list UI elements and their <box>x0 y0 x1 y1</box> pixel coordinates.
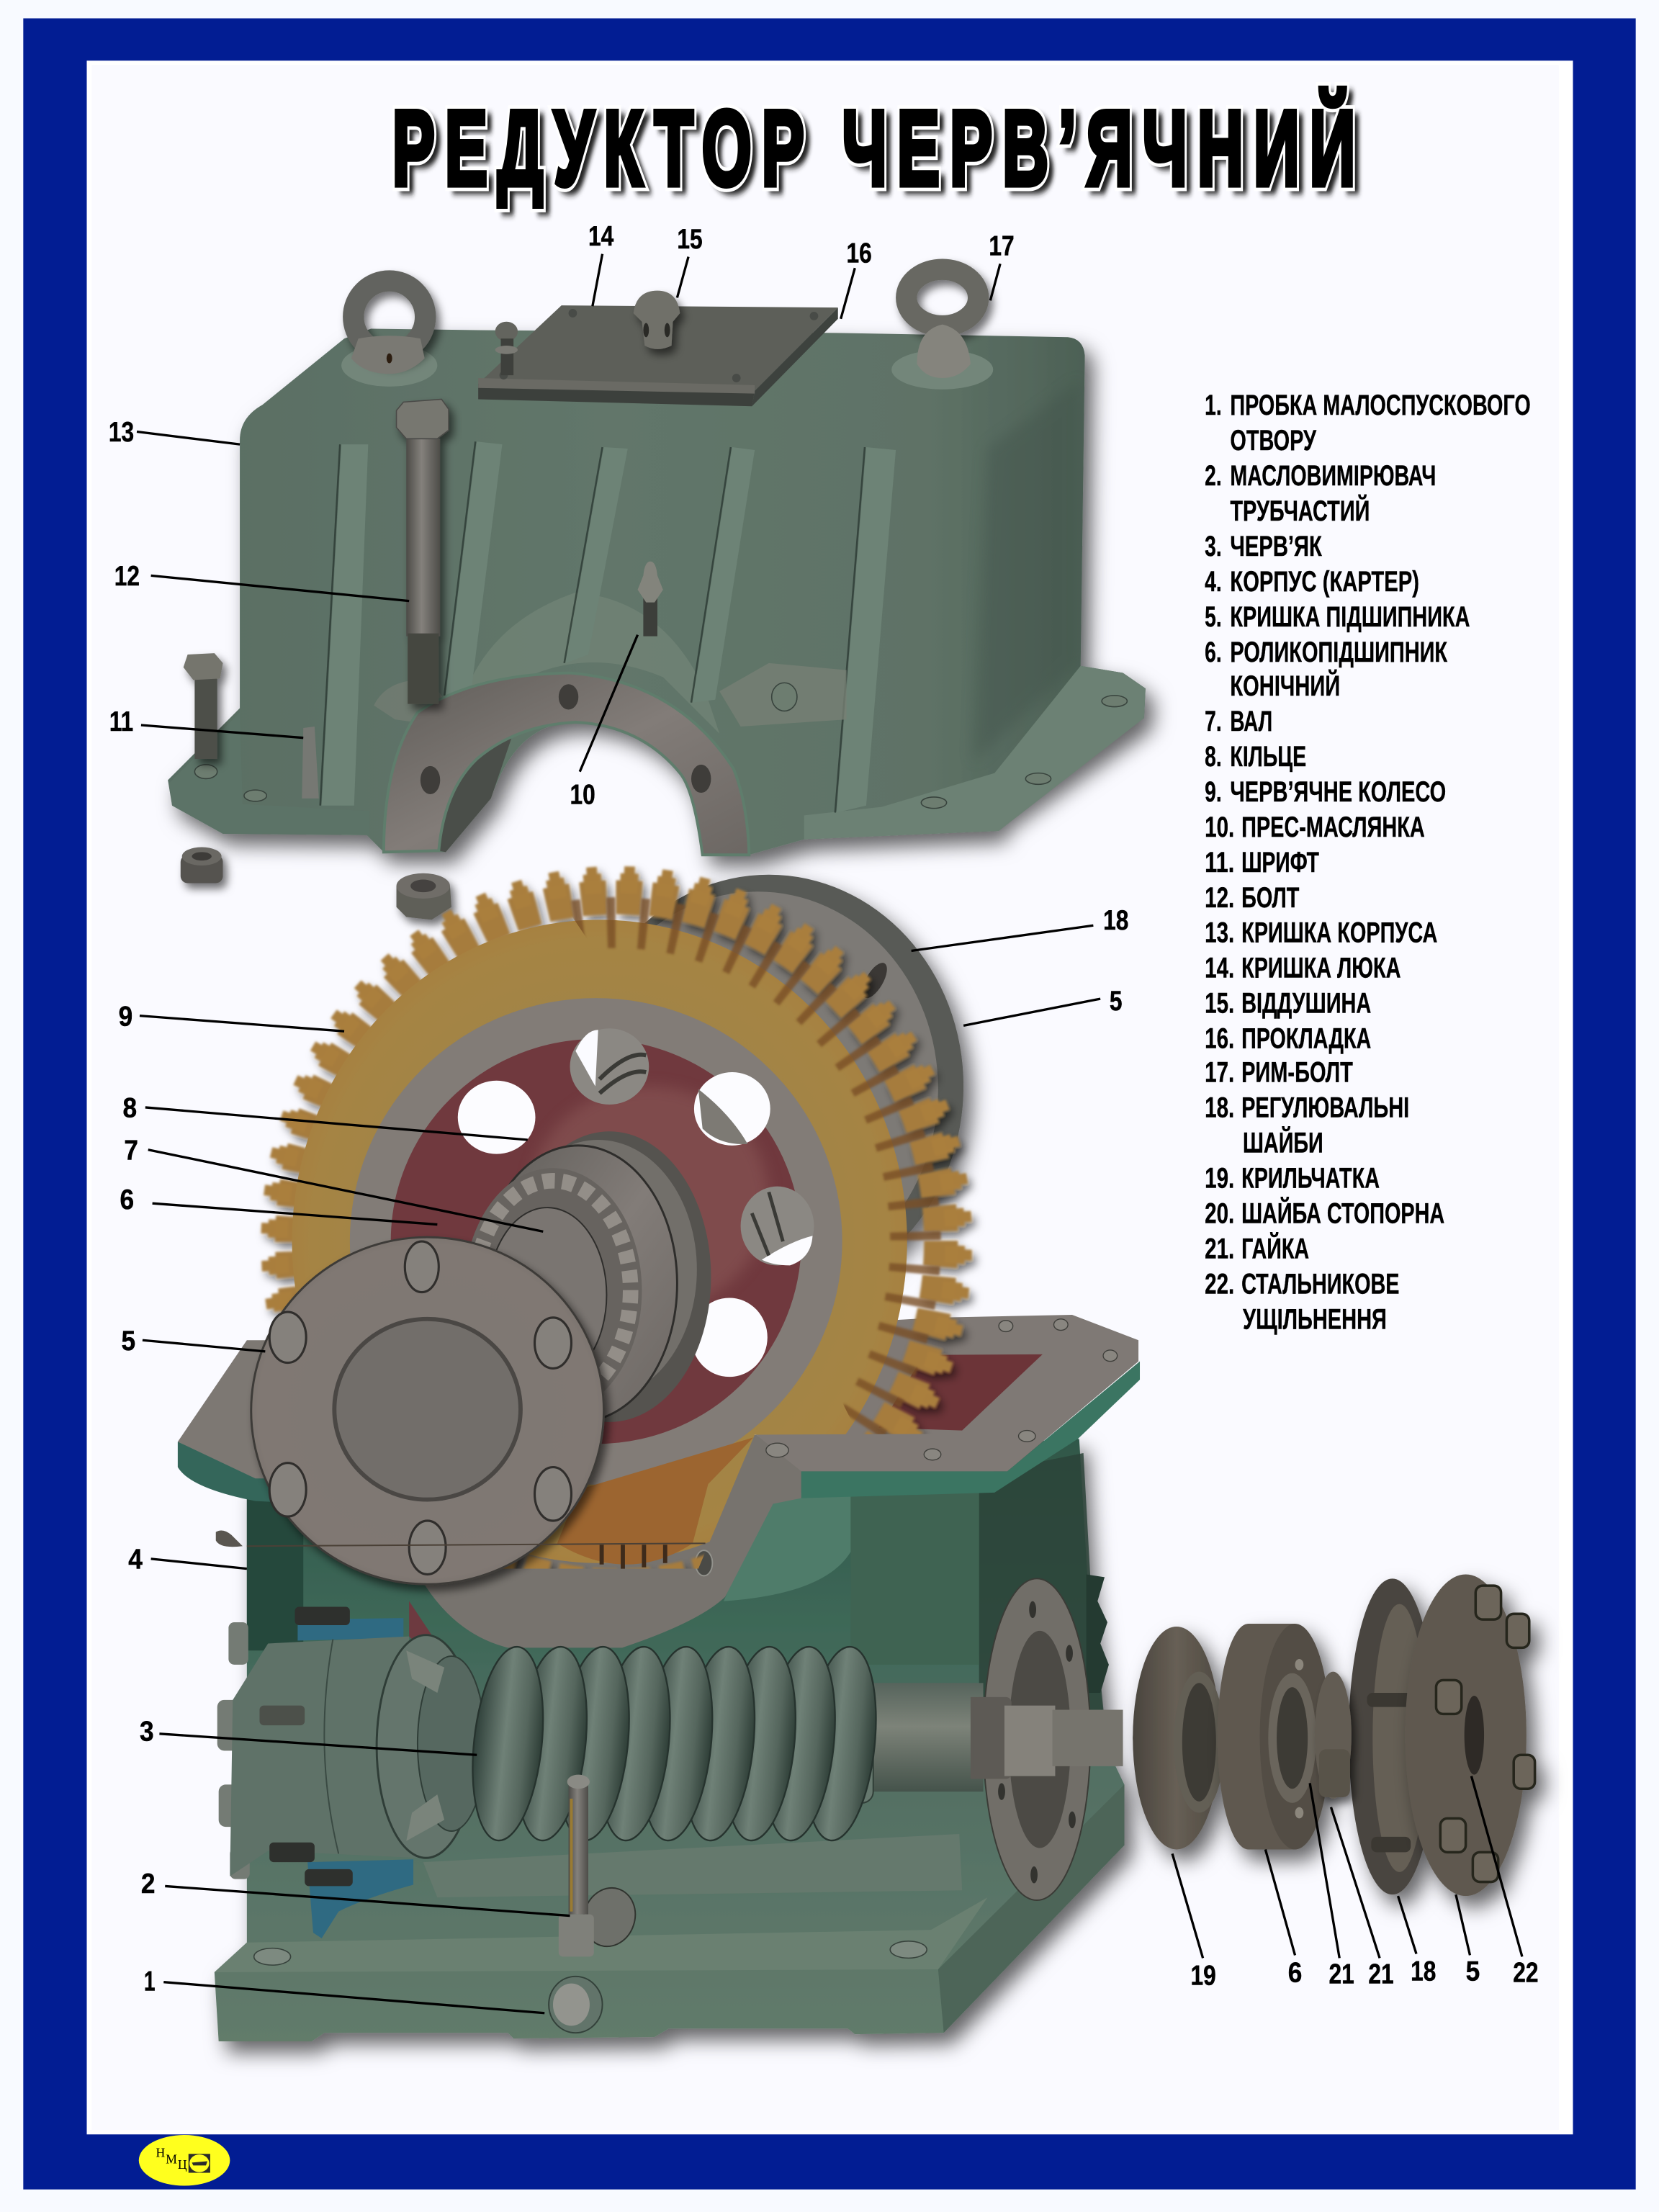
callout 8: 8 <box>122 1093 137 1124</box>
base screws <box>254 1941 927 1965</box>
base side face <box>938 1784 1124 2033</box>
hub centre glow <box>529 1087 769 1312</box>
callout 4: 4 <box>128 1545 143 1575</box>
fan (19) <box>1133 1627 1225 1849</box>
parts legend: 20. <box>1205 1197 1234 1230</box>
right flange <box>804 666 1146 840</box>
parts legend: 10. <box>1205 811 1234 843</box>
flange screws <box>766 1319 1118 1460</box>
parts legend: ШАЙБИ <box>1243 1126 1323 1159</box>
callout 17: 17 <box>989 231 1015 262</box>
housing silhouette <box>215 1439 1124 2041</box>
worm wheel (part 9) <box>268 873 965 1609</box>
callout 5 top: 5 <box>1110 986 1123 1017</box>
parts legend: МАСЛОВИМІРЮВАЧ <box>1230 459 1436 492</box>
parts legend: ПРОКЛАДКА <box>1241 1022 1371 1055</box>
middle dark panel <box>850 1481 979 1665</box>
publisher logo: М <box>166 2152 177 2166</box>
parts legend: 16. <box>1205 1022 1234 1055</box>
parts legend: КРИШКА ЛЮКА <box>1241 952 1401 984</box>
callout 18 bottom <box>1398 1896 1436 1987</box>
callout 4 <box>128 1545 247 1575</box>
parts legend: РЕГУЛЮВАЛЬНІ <box>1241 1092 1409 1124</box>
tooth grooves <box>570 896 943 1434</box>
parts legend: 17. <box>1205 1056 1234 1089</box>
half-bearing ring <box>384 673 749 855</box>
callout 11: 11 <box>109 706 133 737</box>
guard screw <box>696 1550 712 1575</box>
parts legend: 12. <box>1205 881 1234 914</box>
bronze face <box>292 920 907 1563</box>
publisher logo: Н <box>156 2146 165 2160</box>
title: РЕДУКТОР ЧЕРВ’ЯЧНИЙ <box>392 88 1355 207</box>
parting line <box>247 1543 706 1546</box>
callout 5 bottom <box>1456 1894 1480 1987</box>
loose nut 2 <box>397 873 451 920</box>
short bolt <box>184 653 223 759</box>
callout 7 <box>124 1135 543 1231</box>
blue cut-away bottom <box>307 1859 413 1938</box>
cover body <box>168 328 1146 855</box>
lower gray wheel guard <box>418 1434 801 1647</box>
callout 9: 9 <box>119 1001 132 1032</box>
parts legend: 19. <box>1205 1162 1234 1195</box>
long bolt pad <box>374 680 449 727</box>
callout 5 bottom: 5 <box>1466 1956 1480 1987</box>
parts legend: 9. <box>1205 775 1222 808</box>
parts legend: РИМ-БОЛТ <box>1241 1056 1353 1089</box>
parts legend: ГАЙКА <box>1241 1232 1309 1265</box>
oil gauge rod <box>559 1775 594 1956</box>
hole lower <box>691 1298 768 1377</box>
wheel gray ring and red hub <box>370 1019 822 1465</box>
parts legend: ПРЕС-МАСЛЯНКА <box>1241 811 1425 843</box>
publisher logo <box>139 2135 230 2186</box>
flange left plate <box>178 1340 367 1481</box>
callout 21 second <box>1331 1807 1394 1990</box>
fan disc <box>377 1635 485 1858</box>
worm shaft <box>840 1673 1009 1803</box>
callout 10 <box>570 635 638 811</box>
hole top with worm behind <box>570 1028 649 1105</box>
nut (21) <box>1315 1672 1352 1799</box>
parts legend: КРИШКА ПІДШИПНИКА <box>1230 601 1470 633</box>
parts legend: УЩІЛЬНЕННЯ <box>1243 1303 1387 1336</box>
publisher logo: Ц <box>178 2157 187 2172</box>
grease nipple <box>638 562 663 637</box>
right bearing flange <box>984 1574 1109 1900</box>
parts legend: ВІДДУШИНА <box>1241 987 1371 1020</box>
callout 21 second: 21 <box>1368 1959 1394 1990</box>
callout 6 bottom <box>1265 1849 1302 1989</box>
callout 3: 3 <box>140 1717 154 1748</box>
callout 6: 6 <box>120 1184 134 1215</box>
callout 6 <box>120 1184 437 1225</box>
drain plug <box>549 1977 603 2033</box>
right side shading <box>974 381 1079 762</box>
studs <box>259 1607 353 1886</box>
hole upper right <box>694 1072 770 1146</box>
parts legend: 13. <box>1205 917 1234 949</box>
hatch plate <box>478 305 838 406</box>
parts legend: 15. <box>1205 987 1234 1020</box>
parts legend: РОЛИКОПІДШИПНИК <box>1230 636 1447 668</box>
flange screws <box>194 683 1127 809</box>
base top face <box>215 1897 987 1972</box>
callout 1 <box>144 1966 544 2013</box>
parts legend: 5. <box>1205 601 1222 633</box>
parts legend: 4. <box>1205 565 1222 598</box>
callout 1: 1 <box>144 1966 156 1997</box>
callout 22 <box>1471 1776 1538 1989</box>
parts legend: 2. <box>1205 459 1222 492</box>
parts legend: КІЛЬЦЕ <box>1230 740 1306 773</box>
parts legend: СТАЛЬНИКОВЕ <box>1241 1268 1400 1300</box>
callout 12: 12 <box>114 561 140 592</box>
bearing end cap <box>230 1637 419 1876</box>
callout 21 first <box>1310 1783 1354 1990</box>
callout 15 <box>677 224 703 297</box>
callout 9 <box>119 1001 344 1032</box>
callout 2 <box>141 1869 570 1916</box>
callout 5 left <box>121 1326 265 1357</box>
callout 8 <box>122 1093 528 1140</box>
regulating washers (18) <box>1349 1578 1436 1894</box>
hole right <box>741 1187 814 1265</box>
callout 17 <box>989 231 1015 300</box>
regulating disc behind wheel (part 18) <box>574 875 963 1298</box>
parts legend: 8. <box>1205 740 1222 773</box>
bearing cap (part 5) <box>251 1237 604 1584</box>
end cover (5) <box>1405 1574 1535 1896</box>
ball bearing (6) <box>1218 1624 1331 1849</box>
parts legend: ТРУБЧАСТИЙ <box>1230 494 1370 527</box>
oil plug behind gauge <box>576 1881 643 1954</box>
ribs <box>322 441 896 812</box>
roller bearing and ring (parts 6, 7, 8) <box>464 1131 711 1422</box>
parts legend: ЧЕРВ’ЯЧНЕ КОЛЕСО <box>1230 775 1446 808</box>
bolt boss pads <box>719 663 847 727</box>
right eye bolt base <box>891 350 993 390</box>
cap raised centre <box>334 1319 521 1500</box>
worm threads <box>464 1643 885 1844</box>
light central panel <box>724 1493 850 1601</box>
parts legend: 22. <box>1205 1268 1234 1300</box>
parts legend: 21. <box>1205 1233 1234 1265</box>
parts legend: КРИШКА КОРПУСА <box>1241 917 1437 949</box>
parts legend: КОРПУС (КАРТЕР) <box>1230 565 1419 598</box>
lower flange <box>169 712 369 835</box>
arch inner wall <box>439 732 513 852</box>
ledge ribs <box>423 1834 962 1897</box>
callout 14: 14 <box>588 221 613 252</box>
parts legend: КОНІЧНИЙ <box>1230 669 1340 702</box>
left eye bolt collar <box>351 336 425 374</box>
left eye bolt ring <box>354 281 426 353</box>
end cap seam <box>324 1640 338 1853</box>
parts legend <box>1205 389 1531 1336</box>
callout 18 bottom: 18 <box>1411 1956 1436 1987</box>
callout 18 top <box>912 905 1128 950</box>
red cut-away <box>409 1601 444 1672</box>
top flange right <box>756 1315 1140 1498</box>
wheel bottom teeth <box>600 1545 667 1569</box>
parts legend: 1. <box>1205 389 1222 421</box>
parts legend: 7. <box>1205 705 1222 737</box>
parts legend: 6. <box>1205 636 1222 668</box>
bronze wedge under cover <box>557 1437 753 1565</box>
callout 14 <box>588 221 613 306</box>
callout 10: 10 <box>570 780 595 811</box>
parts legend: 11. <box>1205 846 1234 878</box>
parts legend: ШАЙБА СТОПОРНА <box>1241 1197 1444 1230</box>
long bolt <box>397 399 449 704</box>
end cap left lumps <box>217 1622 250 1879</box>
flange left edge <box>178 1442 367 1506</box>
parts legend: ОТВОРУ <box>1230 424 1317 457</box>
callout 19 <box>1172 1853 1216 1992</box>
parts legend: ПРОБКА МАЛОСПУСКОВОГО <box>1230 389 1531 421</box>
rollers <box>475 1181 631 1401</box>
right eye bolt ring <box>907 269 979 326</box>
rib shadow lines <box>320 441 865 812</box>
left eye bolt base <box>341 344 437 387</box>
parts legend: 14. <box>1205 952 1234 984</box>
callout 16 <box>841 238 872 319</box>
breather vent <box>634 291 680 349</box>
blue cut-away top <box>297 1618 403 1641</box>
loose nut <box>181 847 223 883</box>
callout 2: 2 <box>141 1869 156 1899</box>
callout 13 <box>109 417 240 448</box>
callout 21 first: 21 <box>1329 1959 1354 1990</box>
right eye bolt collar <box>917 325 971 378</box>
parts legend: 3. <box>1205 530 1222 562</box>
parts legend: ЧЕРВ’ЯК <box>1230 530 1322 562</box>
callout 19: 19 <box>1191 1961 1216 1992</box>
callout 5 top <box>963 986 1123 1025</box>
callout 13: 13 <box>109 417 134 448</box>
title: РЕДУКТОР ЧЕРВ’ЯЧНИЙ <box>392 88 1355 207</box>
callout 7: 7 <box>124 1135 138 1166</box>
small fitting <box>495 322 518 375</box>
cap bolts <box>269 1241 571 1574</box>
callout 12 <box>114 561 409 601</box>
parts legend: ВАЛ <box>1230 705 1272 737</box>
callout 6 bottom: 6 <box>1288 1958 1302 1989</box>
oil stud <box>216 1530 243 1547</box>
callout 11 <box>109 706 303 738</box>
callout 15: 15 <box>677 224 703 255</box>
pin <box>302 727 319 799</box>
left dark side <box>247 1481 303 1650</box>
parts legend: КРИЛЬЧАТКА <box>1241 1162 1380 1195</box>
callout 5 left: 5 <box>121 1326 135 1357</box>
gearbox housing (part 4) <box>215 1434 1124 2041</box>
callout 18 top: 18 <box>1103 905 1128 936</box>
parts legend: 18. <box>1205 1092 1234 1124</box>
title: РЕДУКТОР ЧЕРВ’ЯЧНИЙ <box>397 94 1361 213</box>
ring holes <box>421 684 711 794</box>
teeth ring <box>268 873 965 1609</box>
output shaft <box>974 1697 1123 1779</box>
parts legend: БОЛТ <box>1241 881 1300 914</box>
callout 16: 16 <box>847 238 872 269</box>
right dark side <box>979 1453 1107 1749</box>
parts legend: ШРИФТ <box>1241 846 1319 878</box>
callout 22: 22 <box>1513 1958 1538 1989</box>
hole left <box>458 1081 536 1154</box>
bearing boss <box>466 593 719 734</box>
housing cover (part 13) <box>168 269 1146 855</box>
exploded parts on right <box>1133 1574 1535 1896</box>
callout 3 <box>140 1717 477 1755</box>
